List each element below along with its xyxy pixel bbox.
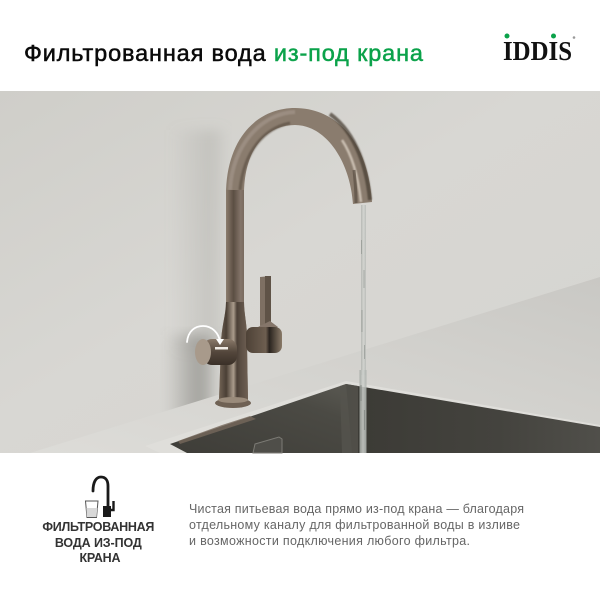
right lever handle — [246, 276, 282, 353]
faucet spout arc — [226, 108, 372, 204]
left knob — [195, 339, 237, 365]
countertop — [30, 277, 600, 453]
feature label: ФИЛЬТРОВАННАЯ — [42, 520, 154, 534]
feature label: ВОДА ИЗ-ПОД — [55, 536, 142, 550]
water stream — [360, 205, 366, 453]
faucet base — [215, 398, 251, 408]
description: Чистая питьевая вода прямо из-под крана — благодаря — [189, 502, 524, 516]
faucet column — [219, 190, 248, 400]
description: и возможности подключения любого фильтра. — [189, 534, 470, 548]
photo: kitchen faucet with running water — [0, 91, 600, 453]
faucet — [195, 108, 372, 408]
logo: IDDIS: IDDIS — [503, 36, 572, 66]
sink drain — [253, 437, 282, 453]
title: Фильтрованная вода из-под крана — [24, 40, 424, 66]
wall — [0, 91, 600, 453]
feature label: КРАНА — [80, 551, 120, 565]
description: отдельному каналу для фильтрованной воды в изливе — [189, 518, 520, 532]
sink — [145, 381, 600, 453]
rotation arrow — [187, 326, 224, 345]
sink reflection of faucet — [178, 416, 256, 444]
icon: glass — [86, 501, 98, 518]
icon: faucet with glass — [86, 477, 114, 518]
